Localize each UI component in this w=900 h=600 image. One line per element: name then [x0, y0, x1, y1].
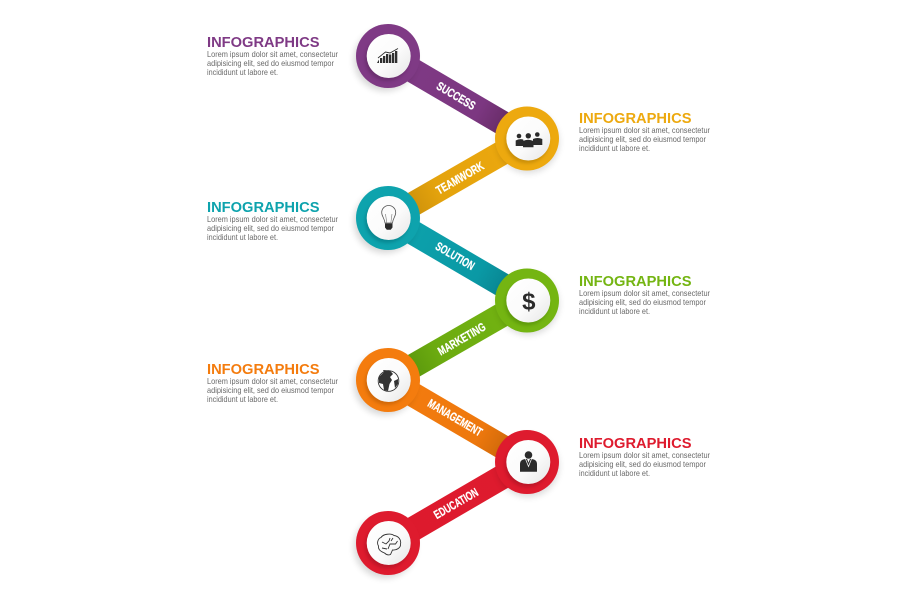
node: red circle: [354, 511, 420, 578]
text block: orange: [207, 361, 338, 404]
text block: yellow: INFOGRAPHICS: [579, 110, 692, 127]
text block: red: incididunt ut labore et.: [579, 469, 650, 478]
node: crimson circle: [495, 430, 559, 497]
label: SOLUTION: SOLUTION: [433, 239, 477, 273]
icon: dollar sign: $: [522, 288, 536, 316]
text block: purple: adipisicing elit, sed do eiusmod tempor: [207, 59, 334, 68]
text block: yellow: Lorem ipsum dolor sit amet, consectetur: [579, 126, 710, 135]
label: TEAMWORK: TEAMWORK: [434, 159, 487, 197]
text block: teal: adipisicing elit, sed do eiusmod tempor: [207, 224, 334, 233]
icon: brain: [378, 534, 401, 555]
band: success: [389, 56, 528, 138]
text block: green: incididunt ut labore et.: [579, 307, 650, 316]
text block: red: adipisicing elit, sed do eiusmod tempor: [579, 460, 706, 469]
text block: teal: Lorem ipsum dolor sit amet, consectetur: [207, 215, 338, 224]
text block: orange: adipisicing elit, sed do eiusmod tempor: [207, 386, 334, 395]
text block: teal: incididunt ut labore et.: [207, 233, 278, 242]
text block: purple: incididunt ut labore et.: [207, 68, 278, 77]
text block: yellow: [579, 110, 710, 153]
text block: teal: [207, 199, 338, 242]
text block: green: Lorem ipsum dolor sit amet, consectetur: [579, 289, 710, 298]
text block: purple: [207, 34, 338, 77]
text block: green: adipisicing elit, sed do eiusmod tempor: [579, 298, 706, 307]
node: orange circle: [354, 348, 420, 415]
icon: light bulb: [382, 206, 396, 230]
node: purple circle: [354, 24, 420, 91]
band: management: [389, 380, 528, 462]
icon: globe: [378, 370, 399, 391]
text block: purple: Lorem ipsum dolor sit amet, consectetur: [207, 50, 338, 59]
band: teamwork: [389, 138, 528, 218]
node: green circle: [495, 268, 559, 335]
label: MARKETING: MARKETING: [435, 320, 488, 358]
text block: teal: INFOGRAPHICS: [207, 199, 320, 216]
label: MANAGEMENT: MANAGEMENT: [425, 396, 485, 440]
text block: orange: incididunt ut labore et.: [207, 395, 278, 404]
band: marketing: [389, 300, 528, 380]
text block: yellow: incididunt ut labore et.: [579, 144, 650, 153]
node: yellow circle: [495, 106, 559, 173]
band: education: [389, 462, 528, 543]
text block: orange: INFOGRAPHICS: [207, 361, 320, 378]
icon: businessman: [520, 451, 537, 472]
text block: red: INFOGRAPHICS: [579, 435, 692, 452]
band: solution: [389, 218, 528, 300]
text block: purple: INFOGRAPHICS: [207, 34, 320, 51]
node: teal circle: [354, 186, 420, 253]
icon: bar chart: [377, 48, 398, 63]
text block: red: [579, 435, 710, 478]
text block: red: Lorem ipsum dolor sit amet, consectetur: [579, 451, 710, 460]
text block: green: [579, 273, 710, 316]
icon: team: [516, 132, 542, 147]
text block: orange: Lorem ipsum dolor sit amet, consectetur: [207, 377, 338, 386]
text block: green: INFOGRAPHICS: [579, 273, 692, 290]
label: SUCCESS: SUCCESS: [434, 79, 478, 113]
label: EDUCATION: EDUCATION: [431, 485, 481, 522]
text block: yellow: adipisicing elit, sed do eiusmod tempor: [579, 135, 706, 144]
